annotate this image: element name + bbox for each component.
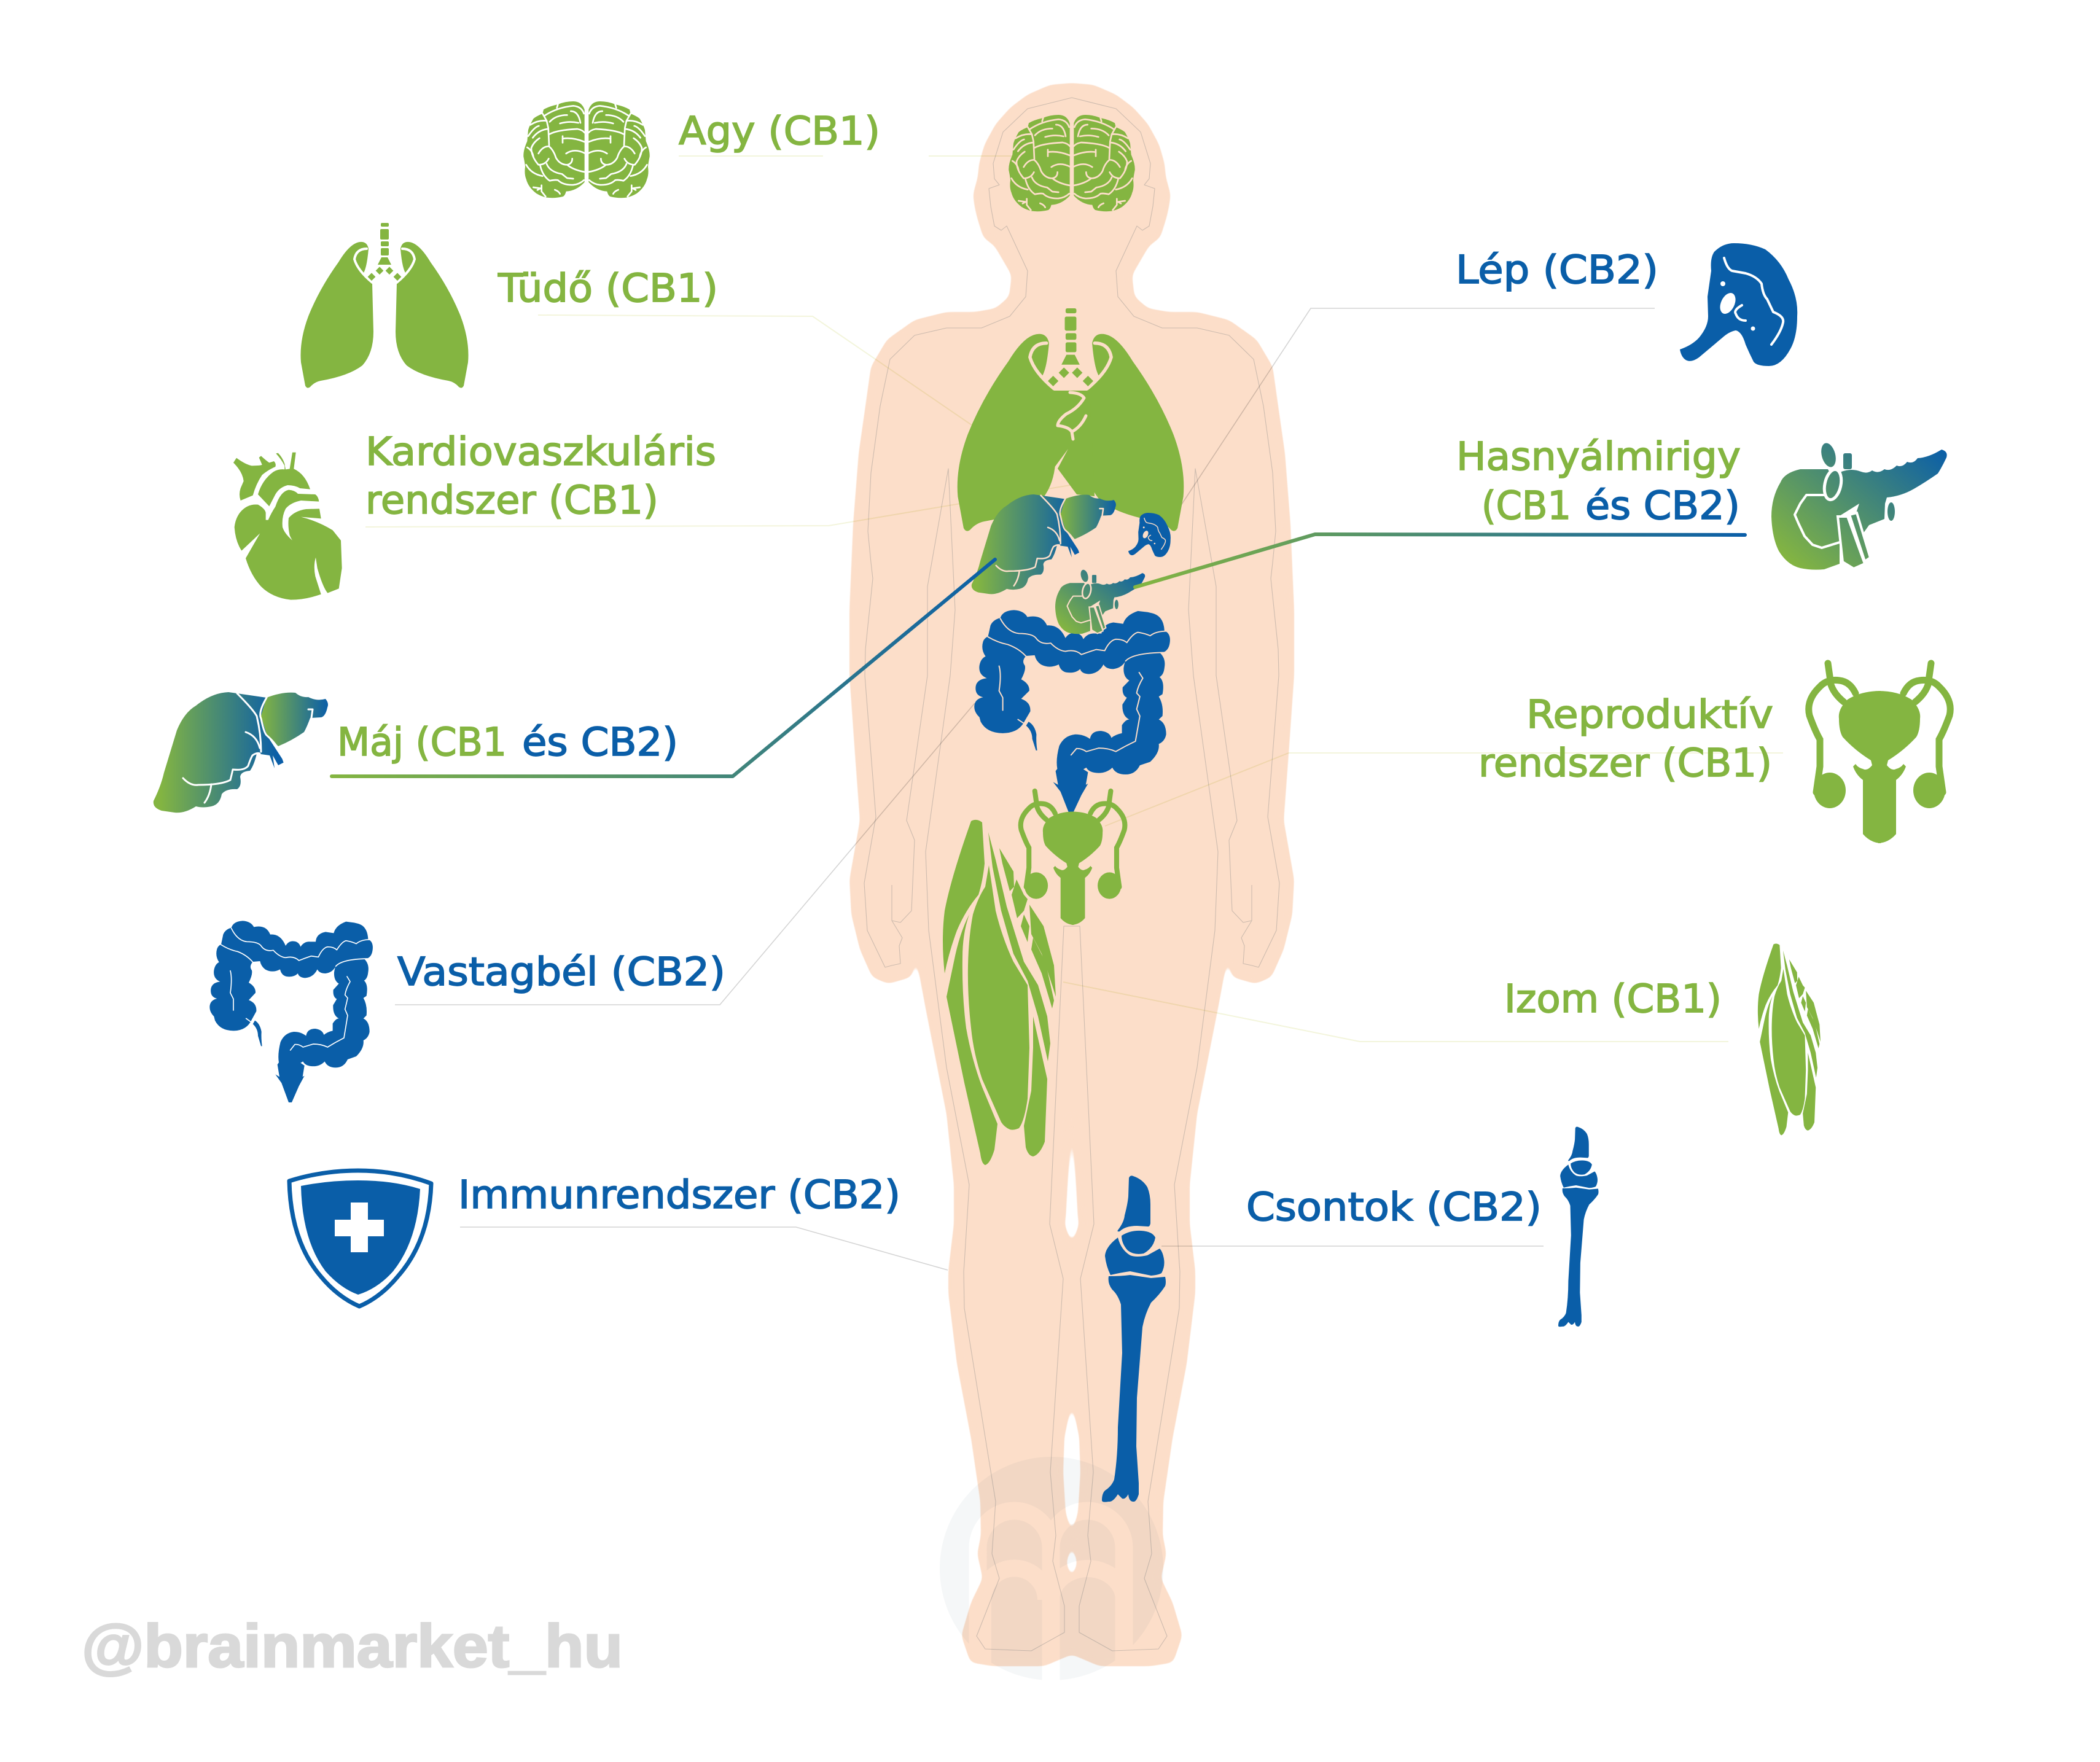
label: Izom: Izom (CB1): [1504, 977, 1722, 1021]
icon: reproductive system: [1809, 663, 1950, 843]
label: Hasnyálmirigy: és CB2): [1585, 483, 1740, 528]
logo watermark: [940, 1457, 1163, 1680]
icon: pancreas: [1771, 442, 1947, 570]
icon: spleen: [1680, 243, 1797, 366]
label: Hasnyálmirigy: Hasnyálmirigy: [1456, 434, 1741, 479]
label: Immunrendszer: Immunrendszer (CB2): [458, 1172, 900, 1217]
body figure: [849, 83, 1294, 1666]
organ: leg bones in body: [1102, 1175, 1166, 1502]
label: Máj: és CB2): [522, 720, 678, 765]
organ: colon in body: [974, 610, 1170, 814]
label: Kardiovaszkuláris rendszer: Kardiovaszkuláris: [365, 429, 716, 474]
organ: spleen in body: [1128, 513, 1171, 557]
label: Csontok: Csontok (CB2): [1246, 1185, 1542, 1230]
icon: shield: [289, 1171, 431, 1306]
label: Hasnyálmirigy: [1456, 434, 1741, 528]
label: Agy: Agy (CB1): [679, 109, 880, 154]
organ: pancreas in body: [1055, 569, 1145, 634]
icon: lungs: [301, 223, 468, 388]
organ: reproductive system in body: [1021, 791, 1125, 925]
label: Reproduktív rendszer: rendszer (CB1): [1478, 741, 1772, 785]
label: Kardiovaszkuláris rendszer: rendszer (CB1): [365, 478, 658, 523]
body contour lines: [864, 98, 1279, 1651]
organ: liver in body: [972, 494, 1116, 594]
organ: lungs in body: [958, 308, 1184, 531]
label: Kardiovaszkuláris rendszer: [365, 429, 716, 523]
organ: brain in body: [1009, 115, 1135, 211]
label: Máj: Máj (CB1: [337, 720, 507, 765]
label: Lép: Lép (CB2): [1456, 248, 1658, 292]
callout line: pancreas: [1135, 534, 1745, 587]
label: Máj: [337, 720, 678, 765]
connector lines: [365, 156, 1783, 1270]
callout line: liver: [332, 559, 995, 776]
icon: heart: [233, 453, 342, 600]
icon: liver: [154, 692, 328, 813]
label: Hasnyálmirigy: (CB1: [1481, 483, 1571, 528]
icon: muscle: [1758, 944, 1821, 1135]
label: Reproduktív rendszer: Reproduktív: [1526, 692, 1773, 737]
label: Tüdő: Tüdő (CB1): [498, 266, 718, 311]
label: Reproduktív rendszer: [1478, 692, 1773, 785]
label: Vastagbél: Vastagbél (CB2): [397, 949, 725, 994]
watermark handle: @brainmarket_hu: [82, 1612, 623, 1680]
icon: bones: [1558, 1127, 1599, 1327]
icon: colon: [209, 921, 373, 1102]
organ: thigh muscle in body: [943, 820, 1056, 1165]
icon: brain: [523, 101, 650, 198]
